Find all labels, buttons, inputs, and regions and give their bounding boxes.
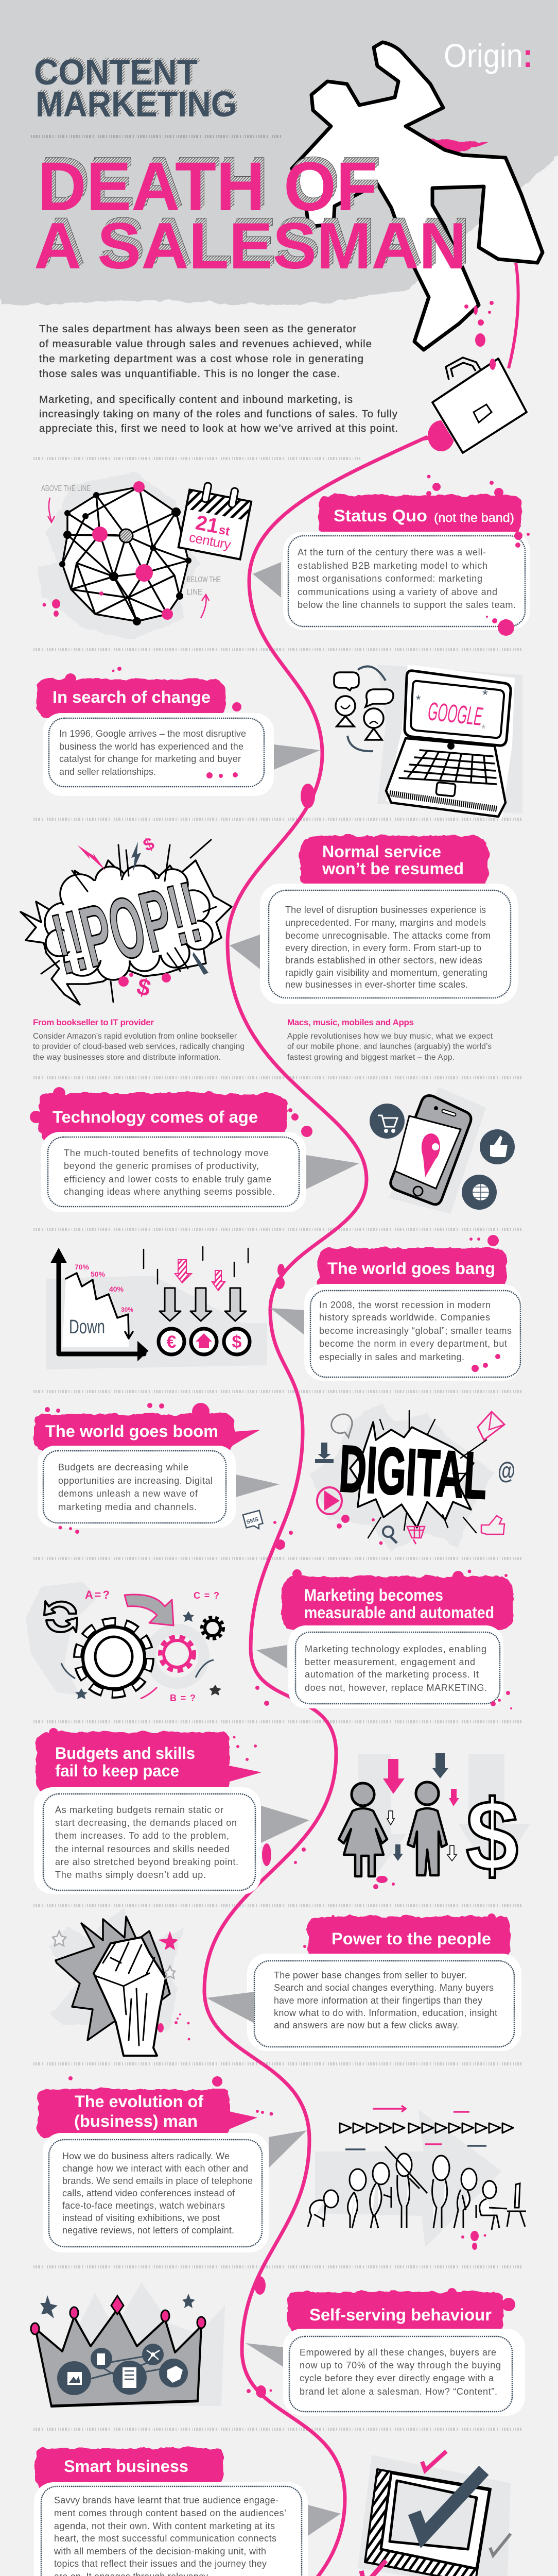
callout pointer bbox=[246, 2343, 283, 2367]
heading: normal service: Normal service bbox=[322, 842, 441, 861]
text box: power to the people bbox=[247, 1954, 521, 2051]
text box: the world goes boom: demons unleash a new wave of bbox=[58, 1488, 198, 1499]
text box: smart business bbox=[34, 2482, 308, 2576]
intro text: increasingly taking on many of the roles and functions of sales. To fully bbox=[39, 408, 398, 420]
heading: the world goes boom: The world goes boom bbox=[45, 1422, 218, 1440]
heading: marketing becomes measurable bbox=[282, 1569, 513, 1631]
text box: technology comes of age: The much-touted benefits of technology move bbox=[64, 1148, 269, 1158]
title: Content Marketing bbox=[34, 50, 239, 124]
text box: status quo: established B2B marketing model to which bbox=[298, 561, 487, 571]
illustration: POP burst: !!POP!! bbox=[44, 863, 210, 993]
text box: smart business: heart, the most successful communication connects bbox=[54, 2533, 276, 2544]
text box: status quo: communications using a variety of above and bbox=[298, 587, 497, 597]
text: macs, music, mobiles and apps: fastest growing and biggest market – the App. bbox=[287, 1053, 455, 1062]
heading: the world goes boom bbox=[34, 1403, 260, 1451]
illustration: network and calendar: 21st bbox=[194, 511, 232, 540]
text box: smart business: topics that reflect their issues and the journey they bbox=[54, 2558, 267, 2569]
heading: evolution of business man bbox=[37, 2076, 273, 2138]
text box: in search of change: catalyst for change for marketing and buyer bbox=[59, 754, 241, 764]
callout pointer bbox=[261, 1806, 309, 1843]
text box: status quo: At the turn of the century there was a well- bbox=[298, 547, 486, 557]
text: macs, music, mobiles and apps: Apple revolutionises how we buy music, what we expect bbox=[287, 1032, 493, 1041]
illustration: falling chart and arrows: € bbox=[167, 1332, 177, 1352]
text box: budgets and skills: are also stretched beyond breaking point. bbox=[55, 1857, 238, 1867]
callout pointer bbox=[236, 1475, 280, 1497]
callout pointer bbox=[269, 2130, 307, 2168]
illustration: people and falling arrows bbox=[339, 1753, 530, 1892]
text: from bookseller to IT provider: Consider Amazon’s rapid evolution from online bookseller bbox=[33, 1032, 237, 1041]
panel: the world goes bang bbox=[46, 1235, 521, 1381]
heading: evolution of business man: The evolution of bbox=[75, 2092, 203, 2111]
text: from bookseller to IT provider: the way businesses store and distribute information. bbox=[33, 1053, 221, 1062]
text box: status quo: most organisations conformed: marketing bbox=[298, 573, 482, 584]
panel: budgets and skills bbox=[34, 1728, 530, 1894]
illustration: laptop and people: * bbox=[416, 693, 421, 707]
heading: budgets and skills bbox=[36, 1728, 261, 1792]
illustration: laptop and people: GOOGLE bbox=[427, 697, 484, 731]
illustration: DIGITAL burst with icons: @ bbox=[498, 1457, 515, 1484]
text box: normal service: become unrecognisable. The attacks come from bbox=[285, 930, 491, 941]
illustration: evolution of man figures bbox=[308, 2106, 526, 2250]
text box: normal service: new businesses in ever-shorter time scales. bbox=[285, 979, 468, 990]
title: Death of a Salesman: A SALESMAN bbox=[38, 204, 470, 277]
text box: in search of change: business the world has experienced and the bbox=[59, 741, 243, 752]
text box: budgets and skills: them increases. To add to the problem, bbox=[55, 1831, 229, 1841]
illustration: laptop and people: * bbox=[481, 722, 486, 735]
illustration: network and calendar: BELOW THE bbox=[187, 575, 221, 584]
illustration: DIGITAL burst with icons bbox=[243, 1402, 515, 1551]
text box: normal service: The level of disruption businesses experience is bbox=[285, 905, 486, 915]
text box: technology comes of age: efficiency and lower costs to enable truly game bbox=[64, 1174, 271, 1184]
text box: evolution of business man: calls, attend video conferences instead of bbox=[62, 2188, 235, 2198]
text box: smart business: Savvy brands have learnt that true audience engage- bbox=[54, 2495, 278, 2505]
callout pointer bbox=[274, 744, 320, 770]
illustration: smartphone with icons bbox=[370, 1087, 515, 1214]
text box: power to the people: and answers are now but a few clicks away. bbox=[274, 2020, 459, 2030]
text: from bookseller to IT provider: From bookseller to IT provider bbox=[33, 1018, 154, 1027]
text: from bookseller to IT provider: to provider of cloud-based web services, radically changing bbox=[33, 1042, 245, 1051]
text box: budgets and skills: the internal resources and skills needed bbox=[55, 1844, 230, 1854]
title: Content Marketing: CONTENT bbox=[37, 50, 200, 90]
text box: status quo bbox=[283, 532, 530, 636]
text box: self-serving behaviour: now up to 70% of the way through the buying bbox=[300, 2360, 501, 2370]
text box: the world goes bang bbox=[304, 1284, 521, 1381]
text box: the world goes boom: opportunities are increasing. Digital bbox=[58, 1476, 213, 1486]
panel: status quo bbox=[38, 472, 530, 639]
text box: marketing becomes measurable: automation of the marketing process. It bbox=[305, 1669, 479, 1680]
text box: the world goes boom: Budgets are decreasing while bbox=[58, 1462, 188, 1472]
illustration: raised fist bbox=[49, 1909, 190, 2056]
text box: in search of change: and seller relationships. bbox=[59, 767, 156, 777]
illustration: gears: A = ? bbox=[85, 1588, 110, 1601]
illustration: gears: C = ? bbox=[194, 1590, 219, 1601]
heading: budgets and skills: Budgets and skills bbox=[55, 1744, 195, 1762]
timeline: winding pink line bbox=[192, 263, 518, 2576]
heading: normal service: won’t be resumed bbox=[322, 859, 464, 878]
heading: marketing becomes measurable: measurable and automated bbox=[304, 1603, 494, 1622]
text box: evolution of business man: brands. We send emails in place of telephone bbox=[62, 2176, 253, 2186]
callout pointer bbox=[308, 2505, 341, 2536]
heading: the world goes bang bbox=[318, 1235, 507, 1290]
text box: marketing becomes measurable bbox=[288, 1625, 512, 1709]
illustration: chalk outline salesman bbox=[292, 42, 543, 350]
intro text: the marketing department was a cost whose role in generating bbox=[39, 353, 363, 365]
text box: evolution of business man bbox=[43, 2133, 269, 2252]
intro text: appreciate this, first we need to look at how we’ve arrived at this point. bbox=[39, 422, 398, 434]
text box: evolution of business man: negative reviews, not letters of complaint. bbox=[62, 2225, 234, 2235]
callout pointer bbox=[230, 935, 260, 969]
title: Content Marketing: MARKETING bbox=[38, 82, 239, 122]
heading: smart business: Smart business bbox=[64, 2457, 188, 2476]
heading: budgets and skills: fail to keep pace bbox=[55, 1761, 179, 1780]
text box: budgets and skills bbox=[34, 1787, 261, 1894]
illustration: network and calendar: LINE bbox=[187, 588, 202, 597]
intro text: Marketing, and specifically content and inbound marketing, is bbox=[39, 394, 353, 405]
text box: smart business: agenda, not their own. With content marketing at its bbox=[54, 2521, 275, 2531]
title: Death of a Salesman bbox=[34, 143, 470, 282]
text box: technology comes of age: beyond the generic promises of productivity, bbox=[64, 1161, 259, 1171]
text box: the world goes bang: especially in sales and marketing. bbox=[319, 1352, 464, 1362]
callout pointer bbox=[256, 1645, 287, 1668]
text box: budgets and skills: As marketing budgets remain static or bbox=[55, 1805, 223, 1815]
heading: the world goes bang: The world goes bang bbox=[327, 1259, 495, 1278]
panel: in search of change bbox=[37, 665, 522, 819]
illustration: falling chart and arrows: Down bbox=[69, 1316, 105, 1338]
background: top grey shape bbox=[0, 0, 558, 306]
text box: self-serving behaviour: Empowered by all these changes, buyers are bbox=[300, 2347, 496, 2358]
heading: in search of change bbox=[37, 667, 258, 720]
text box: normal service: rapidly gain visibility and momentum, generating bbox=[285, 968, 487, 978]
text box: self-serving behaviour: cycle before they ever directly engage with a bbox=[300, 2373, 494, 2383]
intro text: those sales was unquantifiable. This is no longer the case. bbox=[39, 368, 340, 380]
callout pointer bbox=[206, 1992, 254, 2023]
heading: status quo: Status Quo bbox=[334, 506, 427, 525]
panel: technology comes of age bbox=[30, 1087, 515, 1214]
text box: status quo: below the line channels to support the sales team. bbox=[298, 600, 516, 610]
text: macs, music, mobiles and apps: Macs, music, mobiles and Apps bbox=[287, 1018, 414, 1027]
text box: power to the people: Search and social changes everything. Many buyers bbox=[274, 1982, 494, 1993]
title: Death of a Salesman: DEATH OF bbox=[40, 146, 379, 223]
heading: in search of change: In search of change bbox=[53, 688, 211, 706]
text box: marketing becomes measurable: does not, however, replace MARKETING. bbox=[305, 1683, 487, 1693]
illustration: content crown bbox=[31, 2282, 225, 2406]
illustration: checkbox bbox=[358, 2451, 511, 2576]
text box: self-serving behaviour bbox=[283, 2329, 525, 2416]
text box: the world goes bang: become the norm in every department, but bbox=[319, 1338, 507, 1349]
heading: power to the people: Power to the people bbox=[332, 1929, 491, 1948]
text box: normal service bbox=[260, 884, 518, 1004]
illustration: network and calendar bbox=[38, 472, 253, 639]
text box: evolution of business man: face-to-face meetings, watch webinars bbox=[62, 2200, 225, 2211]
heading: normal service bbox=[300, 836, 489, 889]
text box: evolution of business man: instead of visiting exhibitions, we post bbox=[62, 2213, 220, 2223]
title: Death of a Salesman: DEATH OF bbox=[41, 143, 381, 220]
panel: marketing becomes measurable bbox=[26, 1569, 513, 1709]
text box: normal service: brands established in other sectors, new ideas bbox=[285, 955, 482, 965]
text box: budgets and skills: start decreasing, the demands placed on bbox=[55, 1818, 237, 1828]
heading: status quo bbox=[318, 475, 530, 536]
heading: status quo: (not the band) bbox=[434, 511, 514, 525]
text box: marketing becomes measurable: better measurement, engagement and bbox=[305, 1657, 475, 1667]
illustration: falling chart and arrows: 70% bbox=[75, 1263, 90, 1271]
text box: technology comes of age bbox=[41, 1132, 306, 1212]
text box: the world goes boom: marketing media and channels. bbox=[58, 1502, 197, 1512]
illustration: POP burst bbox=[21, 834, 232, 1005]
illustration: briefcase bbox=[422, 358, 529, 455]
panel: normal service bbox=[21, 834, 518, 1062]
callout pointer bbox=[306, 1155, 359, 1189]
illustration: DIGITAL burst with icons: SMS bbox=[246, 1516, 259, 1526]
intro text bbox=[39, 323, 398, 434]
illustration: falling chart and arrows bbox=[46, 1247, 267, 1369]
heading: technology comes of age bbox=[30, 1087, 312, 1141]
text: from bookseller to IT provider bbox=[33, 1018, 245, 1062]
heading: smart business bbox=[35, 2448, 223, 2487]
text: macs, music, mobiles and apps: of our mobile phone, and launches (arguably) the world’s bbox=[287, 1042, 492, 1051]
text box: evolution of business man: change how we interact with each other and bbox=[62, 2163, 248, 2174]
text box: the world goes bang: In 2008, the worst recession in modern bbox=[319, 1300, 491, 1310]
illustration: network and calendar: century bbox=[188, 529, 232, 552]
text box: normal service: every direction, in every form. From start-up to bbox=[285, 943, 481, 953]
text box: the world goes bang: history spreads worldwide. Companies bbox=[319, 1312, 490, 1323]
title: Content Marketing: CONTENT bbox=[34, 52, 198, 92]
text box: in search of change bbox=[43, 713, 274, 796]
illustration: POP burst: $ bbox=[140, 834, 158, 856]
illustration: network and calendar: ABOVE THE LINE bbox=[41, 484, 91, 493]
heading: self-serving behaviour: Self-serving behaviour bbox=[309, 2306, 492, 2324]
panel: self-serving behaviour bbox=[31, 2282, 525, 2416]
text box: smart business: with all members of the decision-making unit, with bbox=[54, 2546, 266, 2556]
text box: power to the people: The power base changes from seller to buyer. bbox=[274, 1970, 467, 1980]
text box: the world goes boom bbox=[38, 1446, 236, 1534]
text box: power to the people: know what to do with. Information, education, insight bbox=[274, 2008, 497, 2018]
panel: smart business bbox=[34, 2448, 511, 2576]
text box: power to the people: have more information at their fingertips than they bbox=[274, 1995, 482, 2006]
illustration: laptop and people: * bbox=[482, 687, 488, 703]
callout pointer bbox=[270, 1308, 304, 1335]
text box: smart business: ment comes through content based on the audiences’ bbox=[54, 2508, 286, 2518]
illustration: POP burst: $ bbox=[134, 972, 154, 1002]
text: macs, music, mobiles and apps bbox=[287, 1018, 493, 1062]
text box: normal service: unprecedented. For many, margins and models bbox=[285, 918, 486, 928]
heading: technology comes of age: Technology comes of age bbox=[53, 1108, 258, 1126]
text box: in search of change: In 1996, Google arrives – the most disruptive bbox=[59, 728, 246, 739]
illustration: falling chart and arrows: 40% bbox=[109, 1285, 124, 1293]
text box: the world goes bang: become increasingly “global”; smaller teams bbox=[319, 1326, 512, 1336]
illustration: gears: B = ? bbox=[170, 1693, 196, 1703]
title: Death of a Salesman: DEATH OF bbox=[38, 148, 377, 225]
illustration: falling chart and arrows: 50% bbox=[91, 1270, 106, 1278]
illustration: laptop and people bbox=[334, 665, 522, 819]
title: Death of a Salesman: A SALESMAN bbox=[36, 207, 468, 280]
illustration: gears bbox=[26, 1582, 223, 1703]
illustration: falling chart and arrows: 30% bbox=[121, 1306, 133, 1313]
heading: power to the people bbox=[303, 1913, 511, 1959]
illustration: falling chart and arrows: $ bbox=[232, 1332, 242, 1352]
panel: the world goes boom bbox=[34, 1402, 515, 1551]
text box: self-serving behaviour: brand let alone a salesman. How? “Content”. bbox=[300, 2386, 497, 2397]
heading: evolution of business man: (business) man bbox=[74, 2112, 198, 2130]
text box: marketing becomes measurable: Marketing technology explodes, enabling bbox=[305, 1644, 486, 1654]
text box: technology comes of age: changing ideas where anything seems possible. bbox=[64, 1187, 275, 1197]
illustration: people and falling arrows: $ bbox=[466, 1780, 518, 1892]
callout pointer bbox=[253, 562, 281, 598]
intro text: of measurable value through sales and revenues achieved, while bbox=[39, 338, 372, 350]
logo: Origin top: Origin: bbox=[444, 37, 533, 74]
title: Content Marketing: MARKETING bbox=[36, 84, 237, 124]
heading: self-serving behaviour bbox=[287, 2288, 515, 2334]
panel: evolution of business man bbox=[37, 2076, 526, 2252]
heading: marketing becomes measurable: Marketing becomes bbox=[304, 1586, 443, 1604]
intro text: The sales department has always been seen as the generator bbox=[39, 323, 356, 335]
title: Death of a Salesman: A SALESMAN bbox=[34, 209, 466, 282]
panel: power to the people bbox=[49, 1909, 521, 2056]
text box: budgets and skills: The maths simply doesn’t add up. bbox=[55, 1870, 206, 1880]
text box: evolution of business man: How we do business alters radically. We bbox=[62, 2151, 230, 2161]
